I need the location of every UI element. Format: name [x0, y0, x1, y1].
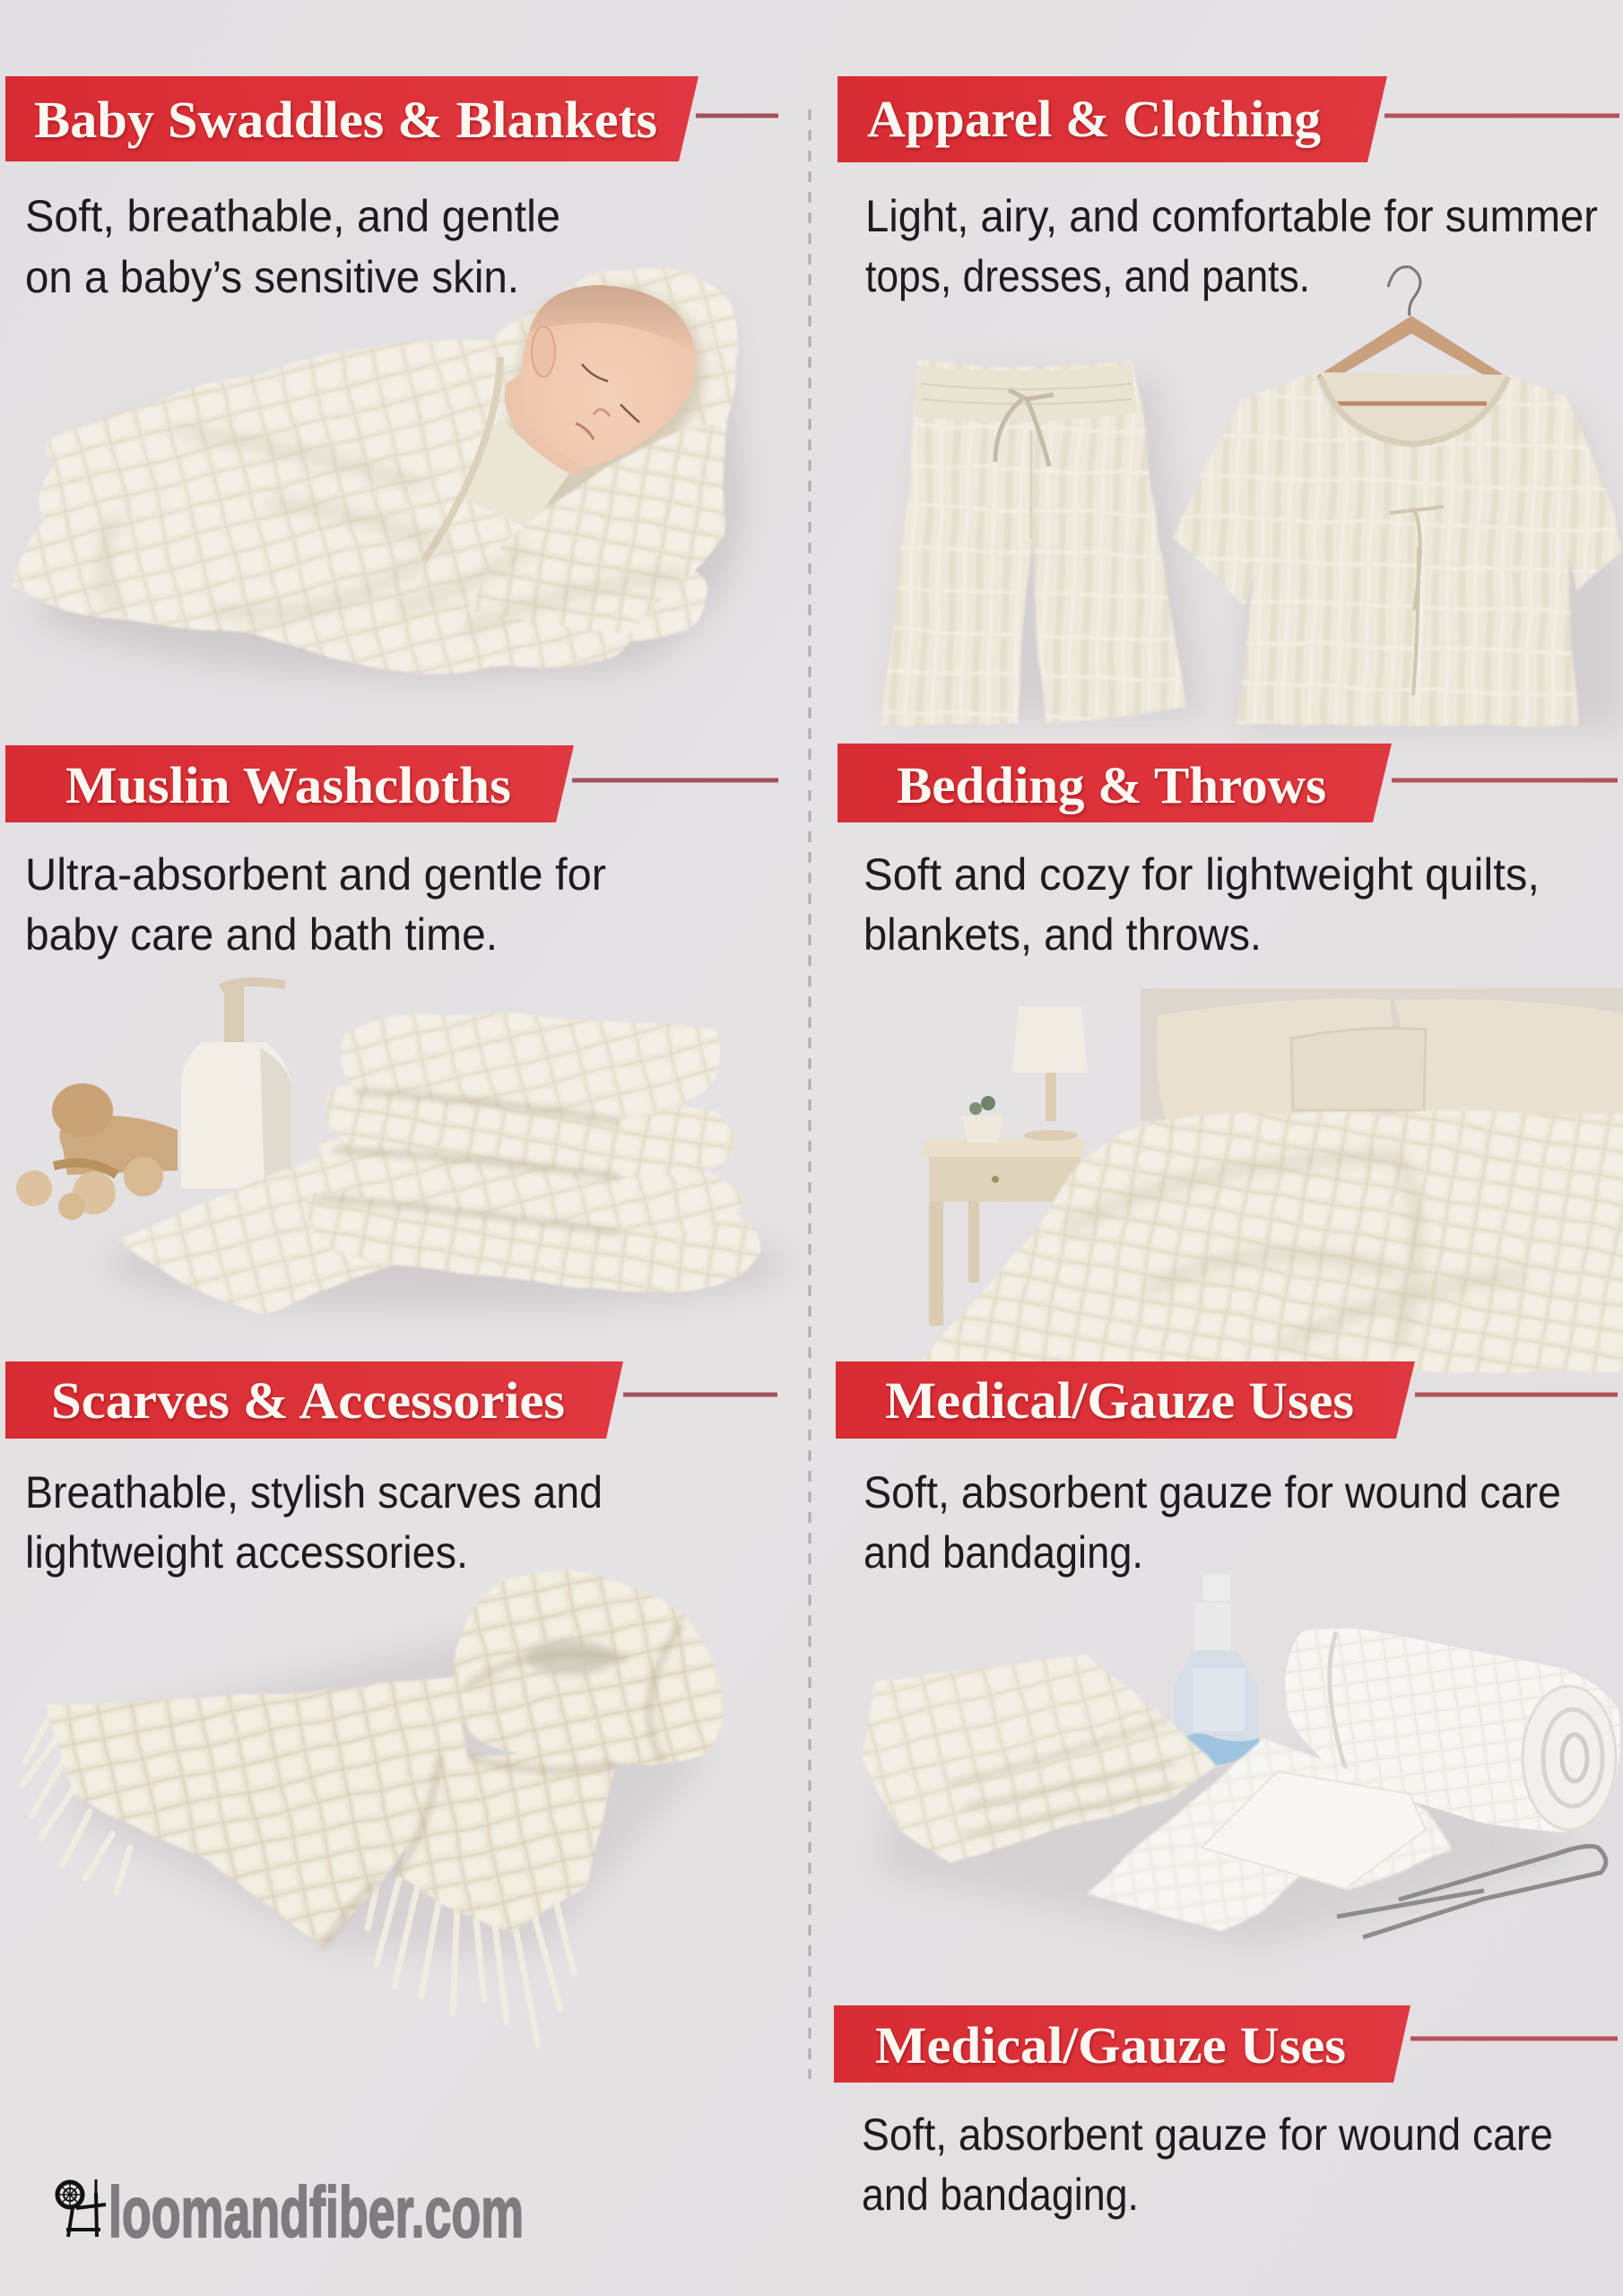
description: scarves: lightweight accessories.	[25, 1527, 468, 1578]
description: scarves: Breathable, stylish scarves and	[25, 1467, 603, 1518]
folded gauze stack	[864, 1655, 1215, 1863]
hanger	[1316, 266, 1506, 384]
folded stack	[306, 1013, 760, 1292]
illustration: shirt on wooden hanger	[1174, 266, 1623, 731]
baby face	[521, 285, 696, 468]
description: baby swaddles: on a baby’s sensitive skin.	[25, 252, 519, 302]
heading banner: baby swaddles	[5, 76, 778, 161]
heading banner: bedding	[838, 744, 1618, 822]
nightstand	[924, 1139, 1085, 1326]
description: medical gauze: and bandaging.	[864, 1527, 1143, 1578]
pants drawstring	[995, 390, 1054, 466]
panel: baby swaddles and blankets	[5, 76, 778, 677]
illustration: draped scarf with fringe	[22, 1571, 725, 2045]
heading banner: bedding: Bedding & Throws	[897, 756, 1326, 814]
duvet	[915, 1111, 1623, 1372]
description: bedding: blankets, and throws.	[864, 909, 1262, 960]
pillows	[1157, 998, 1623, 1130]
lotion pump bottle	[181, 982, 291, 1188]
description: apparel: Light, airy, and comfortable for summer	[865, 191, 1598, 241]
panel: bedding and throws	[838, 744, 1623, 1372]
potted plant	[962, 1096, 1003, 1143]
metal tweezers	[1337, 1847, 1606, 1937]
panel: medical gauze uses	[836, 1361, 1620, 1946]
heading banner: baby swaddles: Baby Swaddles & Blankets	[34, 91, 657, 149]
description: apparel: tops, dresses, and pants.	[865, 251, 1310, 301]
illustration: bed with nightstand and lamp	[915, 988, 1623, 1372]
heading banner: medical gauze	[836, 1361, 1618, 1439]
scarf neck loop	[454, 1571, 725, 1765]
heading banner: washcloths: Muslin Washcloths	[65, 756, 511, 814]
illustration: pants	[881, 361, 1206, 726]
illustration: gauze, bottle, roll and tweezers	[864, 1574, 1620, 1946]
description: apparel	[865, 191, 1598, 301]
heading banner: apparel: Apparel & Clothing	[867, 90, 1321, 148]
description: medical gauze second: Soft, absorbent gauze for wound care	[862, 2109, 1553, 2160]
heading banner: apparel	[838, 76, 1619, 162]
heading banner: scarves	[5, 1361, 777, 1439]
heading banner: scarves: Scarves & Accessories	[51, 1371, 565, 1430]
long body	[44, 1676, 468, 1947]
illustration: swaddled sleeping baby	[11, 268, 744, 677]
description: washcloths: Ultra-absorbent and gentle for	[25, 849, 606, 900]
description: bedding	[864, 849, 1540, 960]
gauze pads	[1086, 1740, 1453, 1931]
brand logo: loomandfiber.com	[57, 2172, 524, 2252]
heading banner: medical gauze: Medical/Gauze Uses	[885, 1371, 1354, 1430]
description: bedding: Soft and cozy for lightweight quilts,	[864, 849, 1540, 900]
panel: second medical gauze uses	[834, 2005, 1618, 2220]
fringe	[22, 1718, 574, 2045]
heading banner: medical gauze second: Medical/Gauze Uses	[875, 2016, 1346, 2074]
spray bottle	[1174, 1574, 1259, 1765]
description: washcloths: baby care and bath time.	[25, 909, 498, 960]
description: washcloths	[25, 849, 606, 960]
table lamp	[1012, 1006, 1088, 1141]
description: medical gauze second: and bandaging.	[862, 2170, 1139, 2220]
description: medical gauze	[864, 1467, 1561, 1578]
description: baby swaddles	[25, 191, 560, 302]
panel: scarves and accessories	[5, 1361, 777, 2045]
wooden toy	[16, 1083, 178, 1220]
heading banner: washcloths	[5, 745, 778, 822]
panel: apparel and clothing	[838, 76, 1623, 731]
icon: spinning wheel	[57, 2179, 106, 2237]
heading banner: medical gauze second	[834, 2005, 1618, 2083]
lower drape	[395, 1749, 614, 1932]
gauze roll	[1285, 1629, 1620, 1832]
panel: muslin washcloths	[5, 745, 789, 1315]
illustration: folded washcloths, bottle and toy	[16, 982, 789, 1315]
description: baby swaddles: Soft, breathable, and gentle	[25, 191, 560, 241]
shirt neck tie	[1390, 507, 1444, 695]
flat washcloth	[117, 1157, 404, 1315]
brand logo: loomandfiber.com: loomandfiber.com	[108, 2172, 524, 2252]
description: scarves	[25, 1467, 603, 1578]
headboard	[1141, 988, 1623, 1121]
description: medical gauze: Soft, absorbent gauze for wound care	[864, 1467, 1561, 1518]
description: medical gauze second	[862, 2109, 1553, 2220]
